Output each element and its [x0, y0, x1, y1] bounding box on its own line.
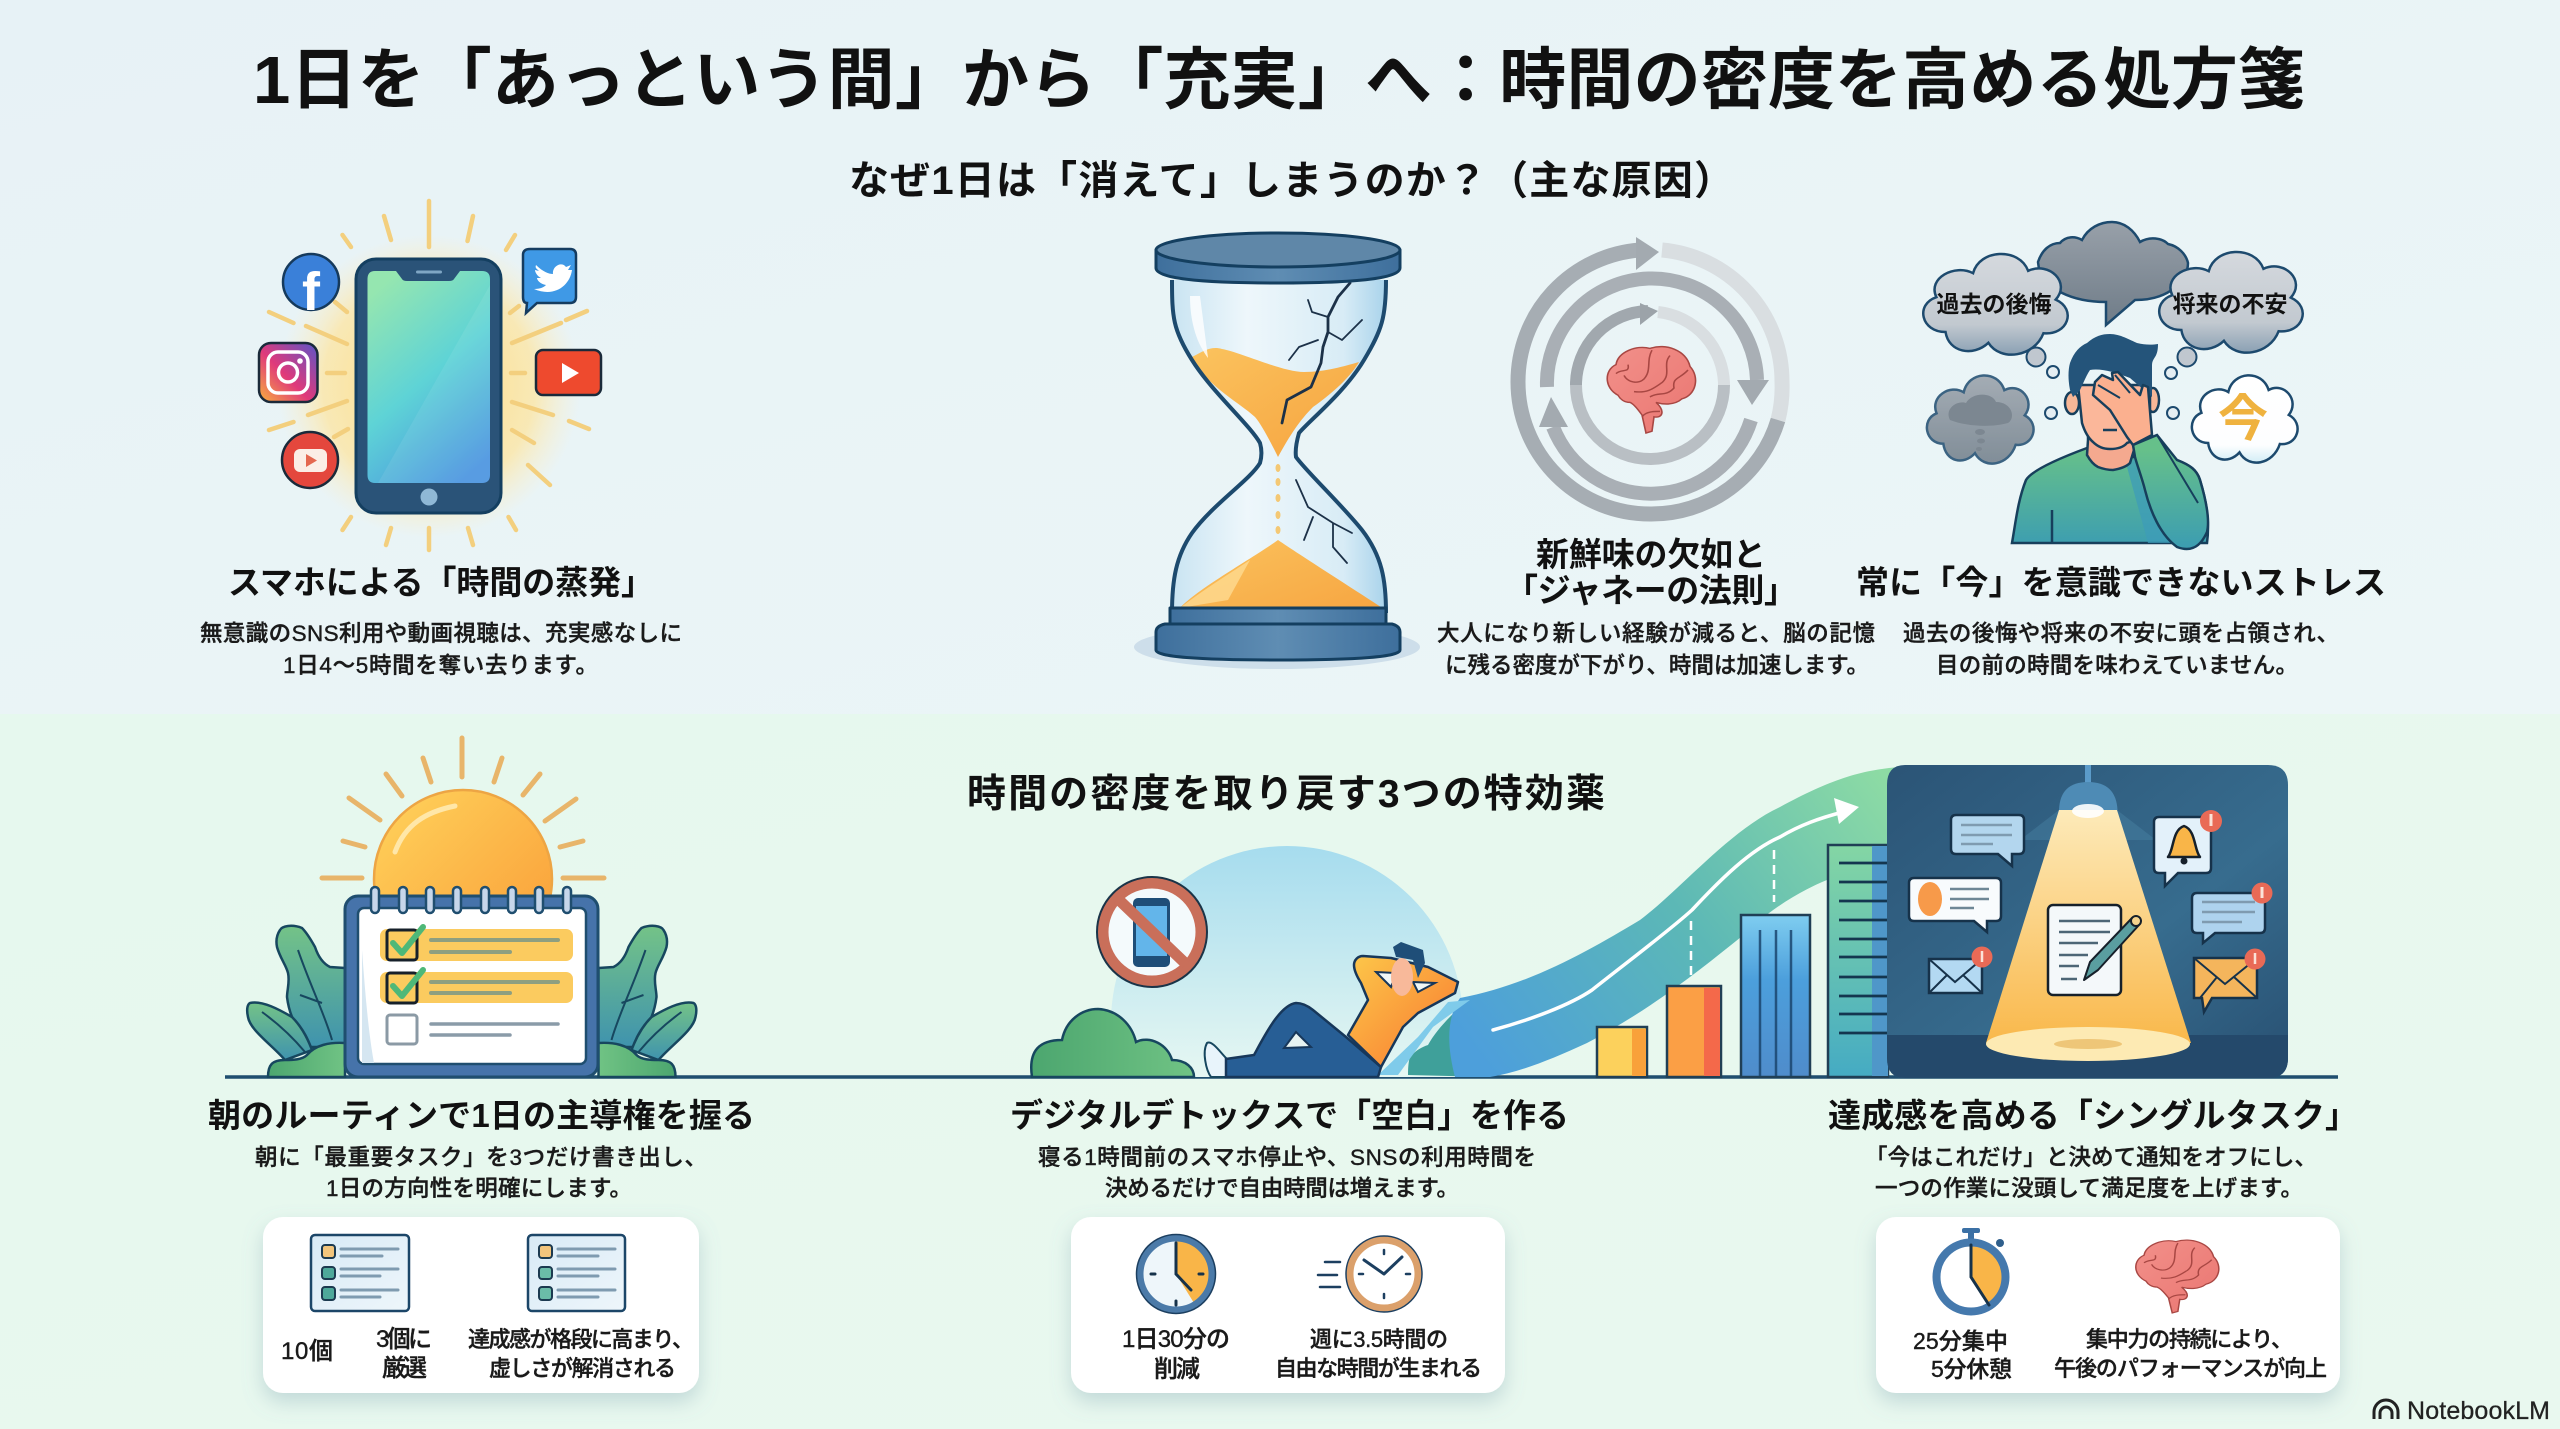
- illustration: spotlight on one task among notifications: [1887, 765, 2288, 1078]
- panel: lack of novelty and Janet's law: [1437, 237, 1875, 678]
- stat: three items: [376, 1326, 432, 1382]
- icon: person with head in hand and thought clouds: 過去の後悔: [1936, 291, 2052, 317]
- icon: circular arrows around brain: [1518, 237, 1782, 514]
- text block: morning routine: [255, 1145, 707, 1201]
- panel: single task: [1828, 765, 2358, 1393]
- stat: ten items: 10個: [281, 1338, 333, 1365]
- stat: sense of achievement: [468, 1327, 694, 1381]
- card: time savings: [1071, 1217, 1505, 1393]
- stat: afternoon performance: 午後のパフォーマンスが向上: [2054, 1356, 2327, 1381]
- stat: 3.5 hours: 週に3.5時間の: [1310, 1327, 1448, 1352]
- stat: 3.5 hours: [1275, 1327, 1482, 1381]
- text block: single task: [1865, 1145, 2317, 1201]
- icon: clock with speed lines: [1318, 1236, 1422, 1312]
- text block: digital detox: 寝る1時間前のスマホ停止や、SNSの利用時間を: [1038, 1145, 1536, 1170]
- stat: three items: 3個に: [376, 1326, 432, 1353]
- icon: person with head in hand and thought clouds: 将来の不安: [2172, 291, 2288, 317]
- text block: digital detox: [1038, 1145, 1536, 1201]
- background: upper section: [0, 0, 2560, 714]
- stat: 30 minutes: 削減: [1154, 1356, 1200, 1383]
- text block: smartphone: [200, 620, 682, 678]
- caption: novelty: 新鮮味の欠如と: [1536, 536, 1766, 573]
- icon: task list before: [311, 1235, 409, 1311]
- caption: novelty: [1505, 536, 1797, 609]
- stat: 25 minutes focus: 5分休憩: [1931, 1356, 2012, 1382]
- title: 1日を「あっという間」から「充実」へ：時間の密度を高める処方箋: [253, 43, 2305, 118]
- icon: task list after: [528, 1235, 625, 1311]
- text block: novelty: 大人になり新しい経験が減ると、脳の記憶: [1437, 621, 1875, 646]
- panel: smartphone time evaporation: [200, 201, 682, 678]
- text block: single task: 「今はこれだけ」と決めて通知をオフにし、: [1865, 1145, 2317, 1170]
- icon: glowing smartphone with social apps: f: [302, 262, 321, 322]
- logo: NotebookLM: NotebookLM: [2407, 1397, 2550, 1425]
- stat: afternoon performance: 集中力の持続により、: [2086, 1327, 2293, 1352]
- chart: rising wave with bars: [1449, 767, 1900, 1077]
- text block: stress: 過去の後悔や将来の不安に頭を占領され、: [1903, 621, 2339, 646]
- caption: single task: 達成感を高める「シングルタスク」: [1828, 1097, 2358, 1134]
- text block: digital detox: 決めるだけで自由時間は増えます。: [1105, 1176, 1459, 1201]
- stat: 3.5 hours: 自由な時間が生まれる: [1275, 1356, 1482, 1381]
- icon: reclining person: [1226, 942, 1470, 1077]
- text block: stress: [1903, 621, 2339, 678]
- text block: morning routine: 朝に「最重要タスク」を3つだけ書き出し、: [255, 1145, 707, 1170]
- icon: stopwatch: [1936, 1228, 2006, 1312]
- stat: sense of achievement: 達成感が格段に高まり、: [468, 1327, 694, 1352]
- panel: digital detox: [1010, 767, 1900, 1393]
- ground line: [225, 1075, 2338, 1079]
- icon: clock with 30 minutes: [1136, 1234, 1216, 1314]
- stat: sense of achievement: 虚しさが解消される: [489, 1356, 676, 1381]
- caption: novelty: 「ジャネーの法則」: [1505, 572, 1797, 609]
- text block: single task: 一つの作業に没頭して満足度を上げます。: [1875, 1176, 2303, 1201]
- background: lower section: [0, 714, 2560, 1429]
- icon: person with head in hand and thought clouds: [1923, 222, 2303, 549]
- caption: morning routine: 朝のルーティンで1日の主導権を握る: [208, 1097, 755, 1134]
- stat: afternoon performance: [2054, 1327, 2327, 1381]
- card: focus results: [1876, 1217, 2340, 1393]
- text block: morning routine: 1日の方向性を明確にします。: [326, 1176, 632, 1201]
- card: task reduction: [263, 1217, 699, 1393]
- caption: stress: 常に「今」を意識できないストレス: [1856, 564, 2386, 601]
- stat: 25 minutes focus: [1913, 1328, 2012, 1382]
- panel: morning routine: [208, 738, 755, 1393]
- caption: smartphone: スマホによる「時間の蒸発」: [228, 564, 654, 601]
- icon: cracked hourglass: [1134, 233, 1420, 669]
- icon: sun rising behind checklist calendar: [247, 738, 696, 1077]
- icon: person with head in hand and thought clouds: 今: [2218, 391, 2268, 447]
- text block: smartphone: 1日4〜5時間を奪い去ります。: [283, 653, 598, 678]
- heading: remedies: 時間の密度を取り戻す3つの特効薬: [967, 773, 1605, 816]
- panel: stress of not being present: [1856, 222, 2386, 678]
- stat: 30 minutes: [1122, 1326, 1230, 1383]
- heading: causes: なぜ1日は「消えて」しまうのか？（主な原因）: [849, 159, 1734, 203]
- text block: novelty: に残る密度が下がり、時間は加速します。: [1445, 653, 1869, 678]
- stat: 25 minutes focus: 25分集中: [1913, 1328, 2008, 1354]
- icon: glowing smartphone with social apps: [259, 201, 601, 550]
- stat: three items: 厳選: [382, 1355, 427, 1382]
- text block: smartphone: 無意識のSNS利用や動画視聴は、充実感なしに: [200, 620, 682, 646]
- caption: digital detox: デジタルデトックスで「空白」を作る: [1010, 1097, 1569, 1134]
- text block: stress: 目の前の時間を味わえていません。: [1936, 653, 2298, 678]
- stat: 30 minutes: 1日30分の: [1122, 1326, 1230, 1353]
- icon: brain: [2136, 1240, 2219, 1313]
- text block: novelty: [1437, 621, 1875, 678]
- illustration: no-phone sign, bushes and sky: [1031, 846, 1490, 1077]
